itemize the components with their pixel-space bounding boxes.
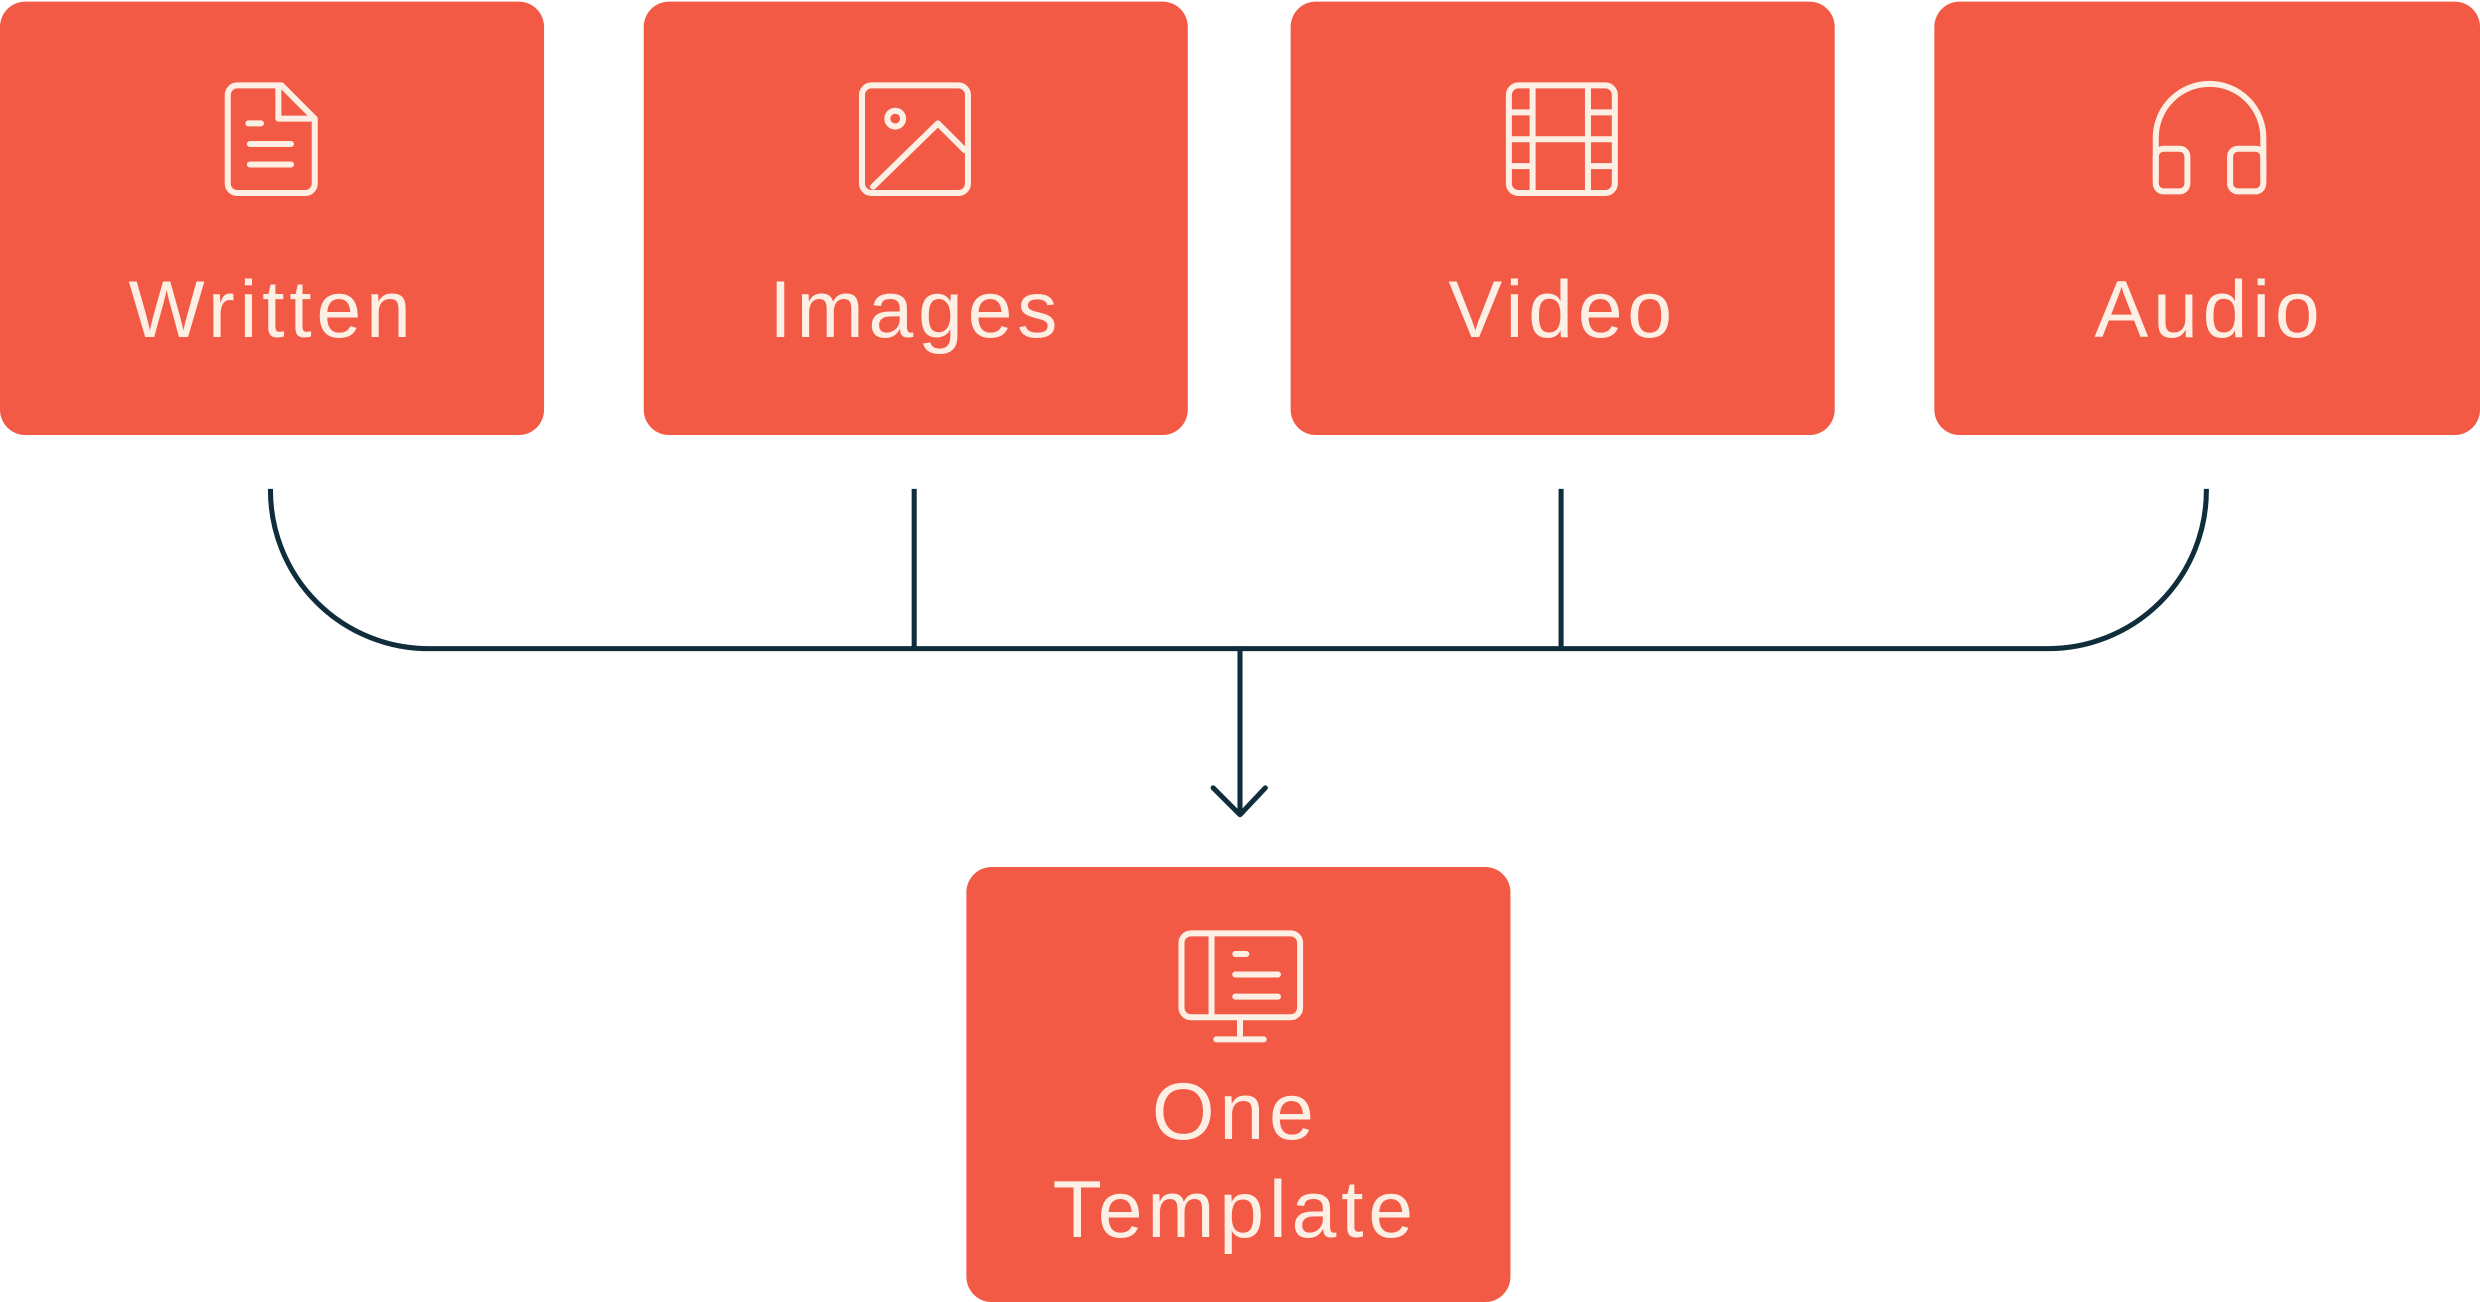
panel: written — [0, 2, 544, 435]
heading: One Template: One — [1152, 1067, 1319, 1157]
heading: Audio: Audio — [2095, 265, 2325, 355]
panel: one template — [966, 867, 1510, 1302]
heading: Video: Video — [1448, 265, 1677, 355]
panel: images — [644, 2, 1188, 435]
heading: One Template — [1053, 1067, 1418, 1255]
panel: video — [1291, 2, 1835, 435]
icon: headphones — [2156, 84, 2263, 191]
icon: monitor — [1181, 933, 1300, 1039]
panel: audio — [1934, 2, 2480, 435]
icon: film — [1509, 85, 1615, 193]
icon: document — [228, 85, 315, 193]
heading: Images: Images — [769, 265, 1062, 355]
arrow — [1213, 649, 1265, 815]
heading: Written: Written — [128, 265, 416, 355]
icon: image — [862, 85, 968, 193]
connector lines — [270, 489, 2206, 649]
heading: One Template: Template — [1053, 1165, 1418, 1255]
